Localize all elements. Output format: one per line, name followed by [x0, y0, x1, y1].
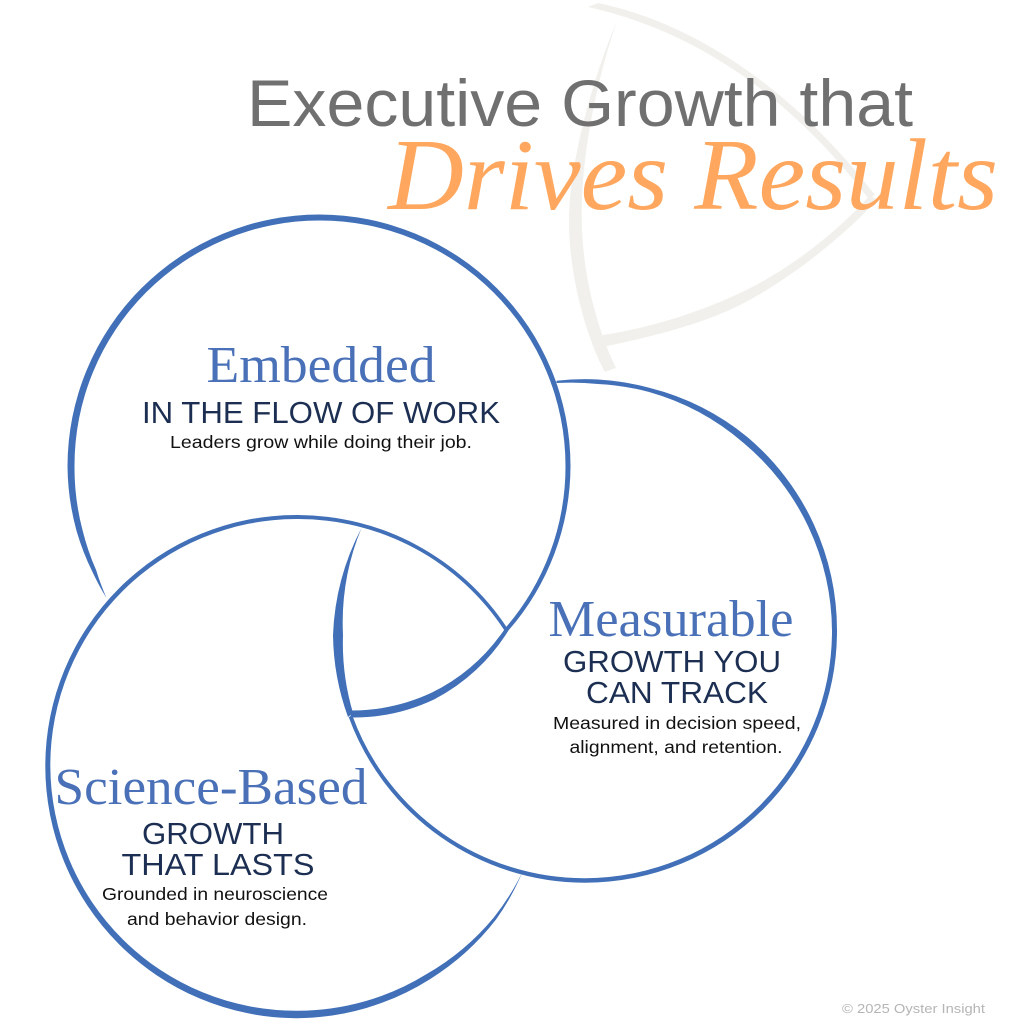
text: science-based: GROWTH: [142, 816, 284, 851]
title: [247, 66, 998, 232]
circle: embedded outline: [68, 214, 570, 718]
circle: measurable outline: [349, 379, 837, 883]
text: measurable: alignment, and retention.: [570, 737, 782, 757]
circle: science-based outline: [45, 515, 522, 1018]
text: science-based: Science-Based: [54, 759, 368, 816]
text: science-based: [54, 759, 368, 929]
title: Executive Growth that: [247, 66, 913, 140]
inner swoosh: [333, 528, 362, 717]
text: measurable: Measured in decision speed,: [553, 713, 801, 733]
text: measurable: Measurable: [548, 591, 794, 648]
text: science-based: Grounded in neuroscience: [102, 884, 328, 904]
decorative background shape: [569, 3, 877, 372]
title: Drives Results: [386, 119, 998, 232]
text: measurable: CAN TRACK: [586, 675, 768, 710]
text: measurable: [548, 591, 801, 757]
text: embedded: Embedded: [206, 337, 436, 394]
text: embedded: Leaders grow while doing their job.: [170, 432, 472, 452]
copyright: © 2025 Oyster Insight: [842, 1001, 985, 1016]
text: science-based: and behavior design.: [127, 909, 307, 929]
text: embedded: [142, 337, 500, 452]
text: measurable: GROWTH YOU: [563, 644, 781, 679]
text: embedded: IN THE FLOW OF WORK: [142, 395, 500, 430]
text: science-based: THAT LASTS: [122, 847, 314, 882]
